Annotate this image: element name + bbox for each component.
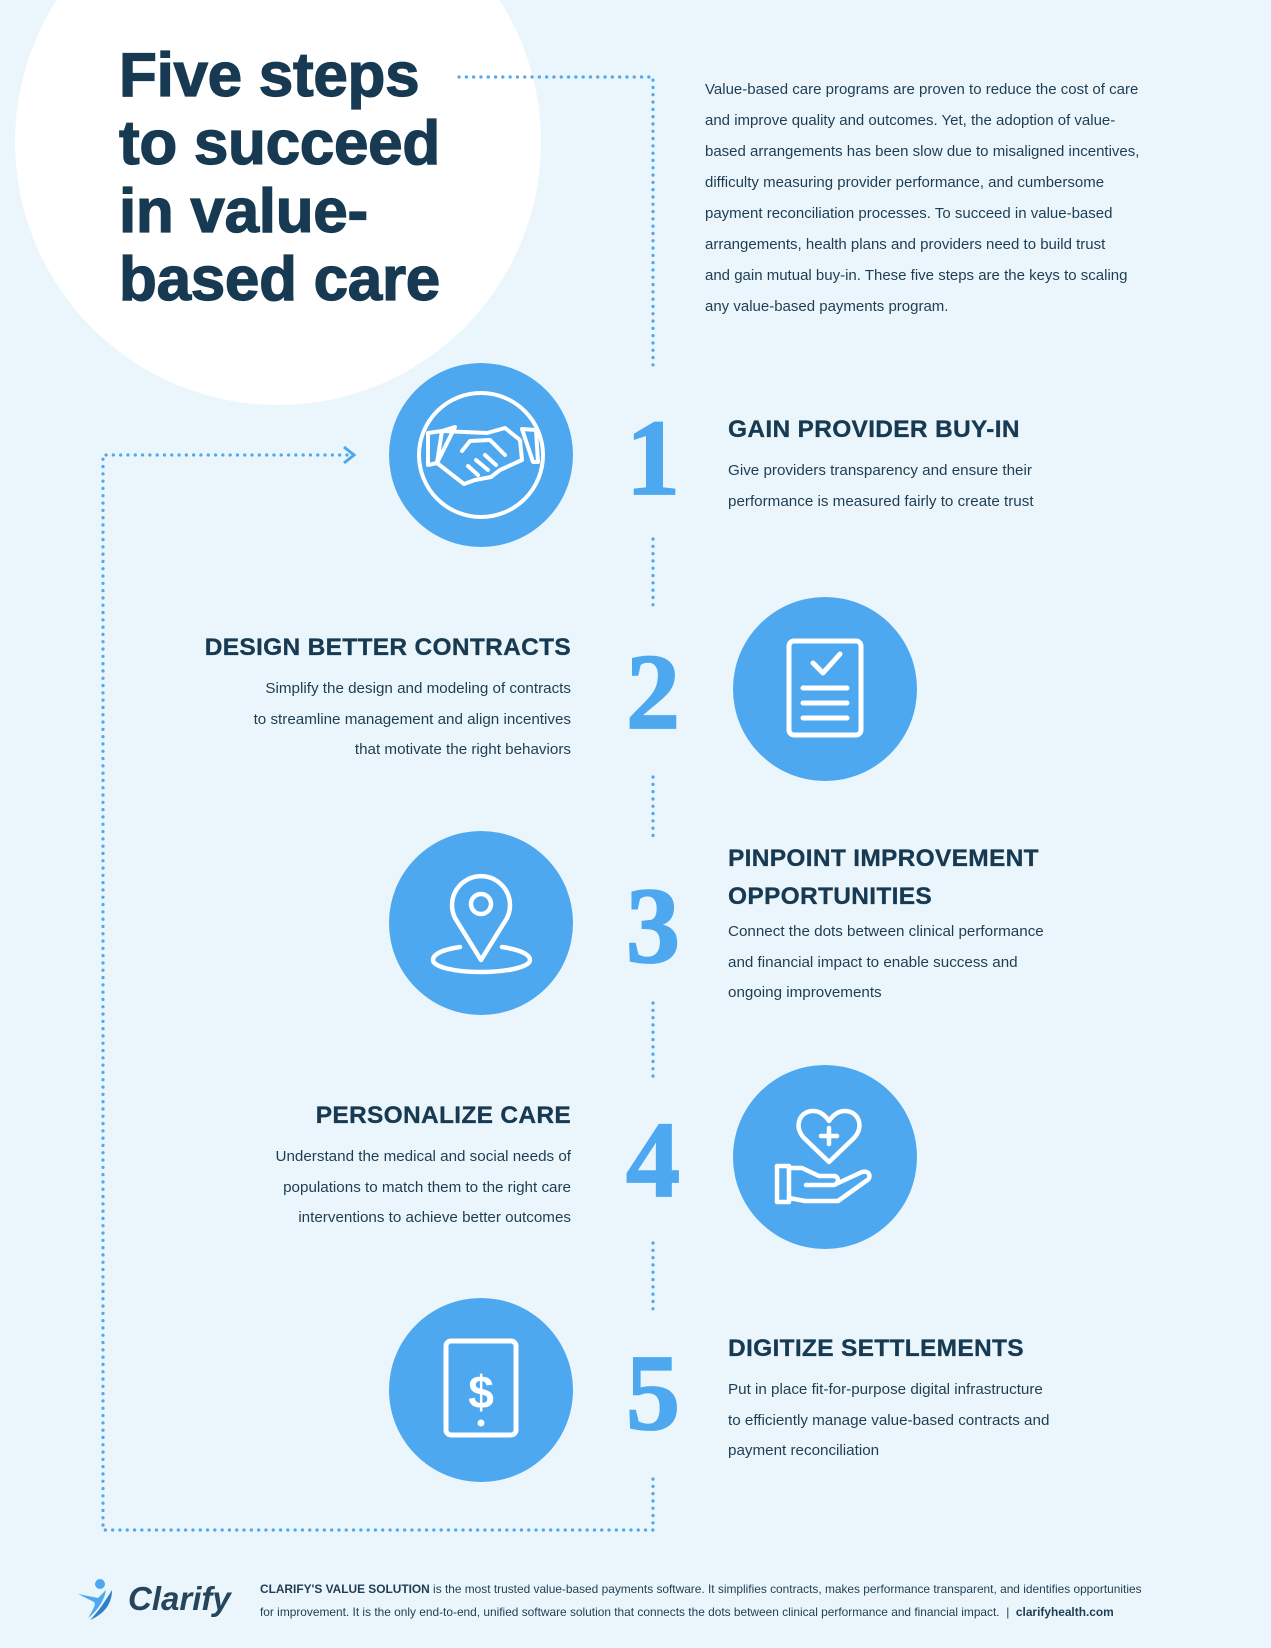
step 5 text: Put in place fit-for-purpose digital infrastructure xyxy=(728,1381,1043,1398)
icon circle 5: dollar tablet: $ xyxy=(468,1366,494,1418)
intro paragraph: based arrangements has been slow due to misaligned incentives, xyxy=(705,143,1139,160)
logo: Clarify xyxy=(78,1579,232,1620)
title: in value- xyxy=(119,177,368,246)
step 1 text: performance is measured fairly to create trust xyxy=(728,492,1034,510)
icon circle 5: dollar tablet xyxy=(389,1298,573,1482)
step 3 text: and financial impact to enable success and xyxy=(728,954,1018,970)
step 3 text xyxy=(728,845,1044,1001)
intro paragraph: difficulty measuring provider performance, and cumbersome xyxy=(705,174,1104,191)
step 4 text: interventions to achieve better outcomes xyxy=(298,1209,571,1226)
logo: Clarify: Clarify xyxy=(128,1580,231,1617)
step 3 text: OPPORTUNITIES xyxy=(728,883,932,910)
footer text xyxy=(260,1582,1142,1619)
step 5 text: payment reconciliation xyxy=(728,1442,879,1459)
step 2 text: that motivate the right behaviors xyxy=(355,741,571,758)
intro paragraph: Value-based care programs are proven to reduce the cost of care xyxy=(705,81,1138,98)
step 3 text: ongoing improvements xyxy=(728,984,882,1001)
icon circle 4: heart in hand xyxy=(733,1065,917,1249)
icon circle 1: handshake xyxy=(389,363,573,547)
step 2 text: Simplify the design and modeling of contracts xyxy=(265,680,571,697)
number 1: 1 xyxy=(626,399,680,518)
title: to succeed xyxy=(119,109,440,178)
intro paragraph xyxy=(705,81,1139,315)
step 2 text xyxy=(205,634,571,758)
step 4 text: PERSONALIZE CARE xyxy=(316,1102,571,1129)
intro paragraph: arrangements, health plans and providers need to build trust xyxy=(705,236,1105,253)
intro paragraph: any value-based payments program. xyxy=(705,298,948,315)
step 3 text: Connect the dots between clinical performance xyxy=(728,923,1044,940)
intro paragraph: and improve quality and outcomes. Yet, the adoption of value- xyxy=(705,112,1115,129)
number 4: 4 xyxy=(626,1101,680,1220)
arrow head xyxy=(344,447,354,463)
step 4 text: populations to match them to the right care xyxy=(283,1178,571,1196)
intro paragraph: payment reconciliation processes. To succeed in value-based xyxy=(705,205,1112,222)
step 5 text: to efficiently manage value-based contracts and xyxy=(728,1412,1049,1428)
title xyxy=(119,41,440,314)
icon circle 3: location pin xyxy=(389,831,573,1015)
step 2 text: DESIGN BETTER CONTRACTS xyxy=(205,634,571,661)
step 2 text: to streamline management and align incentives xyxy=(254,710,571,728)
step 1 text: GAIN PROVIDER BUY-IN xyxy=(728,416,1020,443)
title: Five steps xyxy=(119,41,419,110)
footer text: CLARIFY'S VALUE SOLUTION is the most trusted value-based payments software. It simplifies contracts, makes performance transparent, and identifies opportunities xyxy=(260,1582,1142,1596)
intro paragraph: and gain mutual buy-in. These five steps are the keys to scaling xyxy=(705,267,1127,284)
number 2: 2 xyxy=(626,633,680,752)
number 5: 5 xyxy=(626,1334,680,1453)
step 4 text: Understand the medical and social needs of xyxy=(276,1148,571,1165)
step 4 text xyxy=(276,1102,571,1226)
step 5 text: DIGITIZE SETTLEMENTS xyxy=(728,1335,1024,1362)
step 1 text: Give providers transparency and ensure their xyxy=(728,462,1032,479)
title: based care xyxy=(119,245,440,314)
icon circle 2: checklist xyxy=(733,597,917,781)
background white circle xyxy=(15,0,541,405)
step 1 text xyxy=(728,416,1034,510)
footer text: for improvement. It is the only end-to-end, unified software solution that connects the dots between clinical performance and financial impact. | clarifyhealth.com xyxy=(260,1605,1114,1619)
step 3 text: PINPOINT IMPROVEMENT xyxy=(728,845,1039,872)
step 5 text xyxy=(728,1335,1049,1459)
number 3: 3 xyxy=(626,867,680,986)
